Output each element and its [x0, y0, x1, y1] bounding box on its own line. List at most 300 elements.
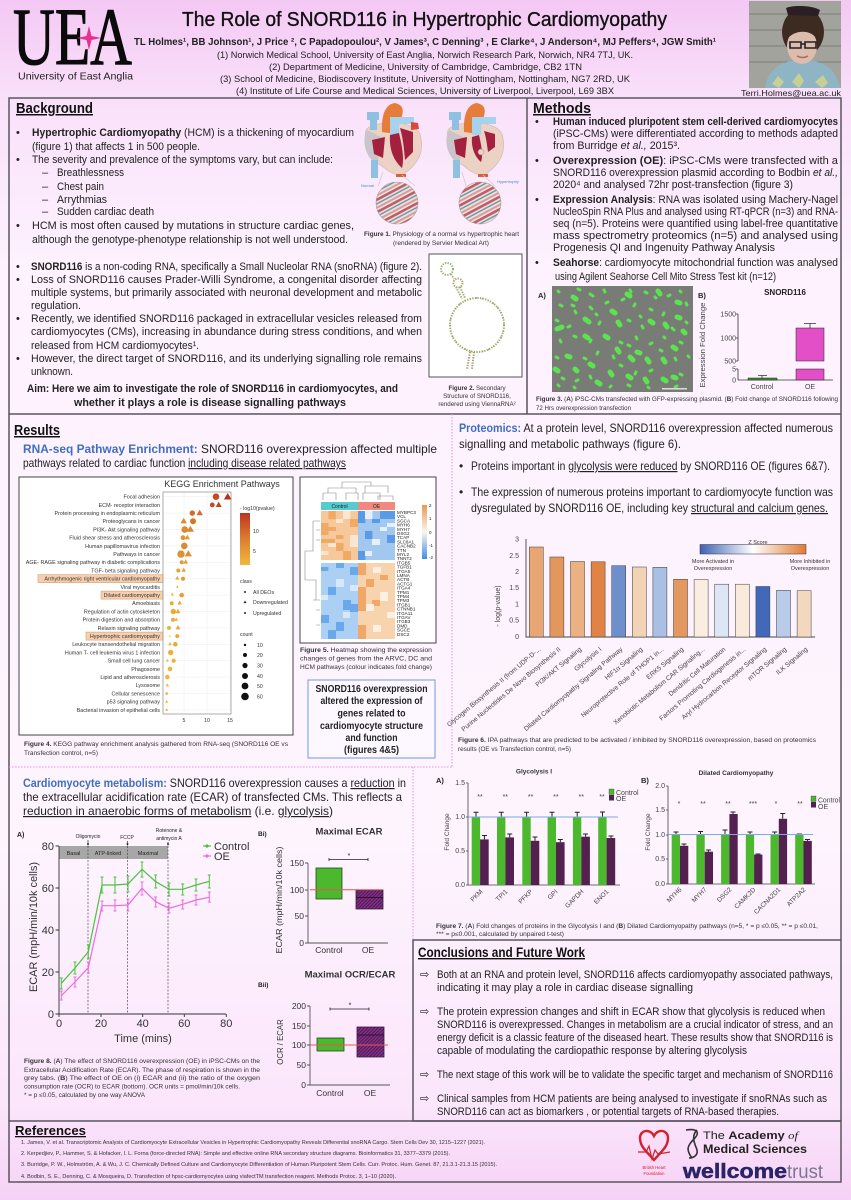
pathway labels: Cellular senescence	[111, 691, 160, 697]
figure 5: heatmap: 0	[429, 530, 432, 535]
gene labels: DSG2	[397, 531, 410, 536]
figure 2 caption: rendered using ViennaRNA²	[438, 401, 516, 408]
figure 7B: dilated cardiomyopathy bars: ***	[749, 801, 757, 808]
figure 7B: dilated cardiomyopathy bars: 2.0	[655, 783, 665, 790]
gene labels: MYBPC3	[397, 510, 416, 515]
figure 8Bi: maximal ECAR box plot: Bi)	[258, 831, 267, 838]
figure 3B: SNORD116 bar chart: OE	[805, 384, 815, 391]
pathway labels: Regulation of actin cytoskeleton	[84, 609, 160, 615]
figure 7A: glycolysis I bars: 0.0	[455, 882, 465, 889]
text block: HCM introduction: Breathlessness	[57, 167, 124, 179]
panel: results	[14, 422, 437, 758]
gene labels: ITGB1	[397, 602, 411, 607]
pathway labels: Lipid and atherosclerosis	[100, 675, 160, 681]
author photo	[749, 1, 841, 88]
figure 7B: dilated cardiomyopathy bars: 0.0	[655, 881, 665, 888]
figure 8Bii: maximal OCR/ECAR box plot: Control	[316, 1088, 344, 1098]
figure 7A: glycolysis I bars: Fold Change	[444, 813, 451, 851]
figure 5 caption: HCM pathways (colour indicates fold change)	[300, 664, 432, 671]
pathway labels: Phagosome	[131, 667, 160, 673]
figure 7A: glycolysis I bars: Glycolysis I	[516, 768, 552, 776]
text block: proteomics summary: Proteins important in glycolysis were reduced by SNORD116 OE (figures 6&7).	[471, 459, 830, 473]
data points	[165, 493, 232, 711]
legends: 50	[257, 684, 263, 690]
figure 8Bii: maximal OCR/ECAR box plot: Maximal OCR/ECAR	[305, 970, 396, 980]
logo: Wellcome Trust: trust	[787, 1162, 824, 1183]
figure 7A: glycolysis I bars: **	[553, 794, 559, 801]
figure 7A: glycolysis I bars: **	[477, 794, 483, 801]
logo: Academy of Medical Sciences: The Academy of	[703, 1130, 800, 1142]
heading: methods: Methods	[533, 100, 591, 117]
text block: HCM introduction: Sudden cardiac death	[57, 206, 154, 218]
pathway labels: Human papillomavirus infection	[85, 544, 160, 550]
figure 2: RNA secondary structure	[429, 254, 522, 377]
figure 7A: glycolysis I bars: 1.5	[455, 780, 465, 787]
legends: Upregulated	[253, 611, 281, 617]
text block: methods list	[535, 116, 839, 283]
figure 7B: dilated cardiomyopathy bars: Fold Change	[645, 813, 652, 851]
icon: normal heart	[364, 103, 422, 178]
heading: references: References	[15, 1123, 86, 1138]
y axis: 0.5	[509, 618, 519, 624]
figure 3B: SNORD116 bar chart	[698, 288, 833, 391]
heatmap blocks	[321, 511, 358, 560]
OE series	[60, 882, 211, 1000]
figure 7B: dilated cardiomyopathy bars: **	[700, 801, 706, 808]
text block: proteomics summary: •	[459, 485, 463, 499]
x axis ticks: 10	[204, 718, 210, 724]
figure 7B: dilated cardiomyopathy bars: **	[797, 801, 803, 808]
figure 8Bi: maximal ECAR box plot	[258, 826, 388, 955]
bar labels: Factors Promoting Cardiogenesis in...	[658, 646, 747, 722]
figure 7A: glycolysis I bars: **	[528, 794, 534, 801]
figure 2 caption: Figure 2. Secondary	[448, 385, 506, 392]
figure 6 caption: Figure 6. IPA pathways that are predicted to be activated / inhibited by SNORD116 overexpression, based on proteomics	[458, 737, 816, 744]
legends: 20	[257, 653, 263, 659]
text block: SNORD116 introduction: regulation.	[31, 300, 81, 312]
text block: HCM introduction: (figure 1) that affects 1 in 500 people.	[32, 141, 200, 153]
bar labels: Aryl Hydrocarbon Receptor Signaling	[681, 646, 769, 721]
figure 3B: SNORD116 bar chart: 5	[732, 366, 736, 374]
axes: 60	[42, 883, 54, 895]
legends: class	[240, 579, 252, 585]
figure 8 caption: grey tabs. ( B) The effect of OE on (i) ECAR and (ii) the ratio of the oxygen	[24, 1075, 261, 1082]
text block: SNORD116 introduction: released from HCM cardiomyocytes¹.	[31, 340, 199, 352]
callout: gene expression summary: altered the expression of	[320, 696, 423, 707]
conclusion 2: ⇨	[420, 1006, 429, 1018]
gene labels: SGCA	[397, 518, 411, 523]
text block: HCM introduction: –	[42, 206, 49, 218]
icon: hypertrophic heart	[446, 103, 504, 178]
chart legend: Control	[214, 841, 249, 853]
bars	[529, 547, 811, 637]
axes: Time (mins)	[114, 1033, 172, 1045]
text block: methods list: Overexpression (OE): iPSC-CMs were transfected with a	[553, 155, 839, 167]
bar labels: Purine Nucleotides De Novo Biosynthesis II	[460, 646, 562, 733]
figure 7A: glycolysis I bars: **	[578, 794, 584, 801]
text block: HCM introduction: •	[16, 220, 20, 232]
pathway labels: Bacterial invasion of epithelial cells	[77, 708, 160, 714]
text block: proteomics summary: dysregulated by SNORD116 OE, including key structural and calcium genes.	[471, 501, 828, 515]
text block: methods list: SNORD116 overexpression plasmid according to Bodbin et al.,	[553, 167, 838, 179]
figure 1: heart illustrations: Normal	[361, 183, 374, 188]
respiration phase tabs: FCCP	[120, 835, 134, 841]
respiration phase tabs: Oligomycin	[76, 834, 101, 840]
text block: metabolism summary: reduction in anaerobic forms of metabolism (i.e. glycolysis)	[23, 804, 333, 818]
text block: SNORD116 introduction: Recently, we identified SNORD116 packaged in extracellular vesicles released from	[31, 313, 422, 325]
pathway labels: Lysosome	[136, 683, 160, 689]
pathway labels: PI3K- Akt signaling pathway	[93, 527, 160, 533]
gene labels: ITGA5	[397, 569, 411, 574]
figure 8Bii: maximal OCR/ECAR box plot: OE	[364, 1088, 376, 1098]
legends: 5	[253, 549, 256, 555]
panel: conclusions and future work	[418, 944, 833, 1118]
respiration phase tabs: ATP-linked	[95, 851, 121, 857]
gene labels: MYL2	[397, 552, 409, 557]
gene labels: ACTG1	[397, 581, 413, 586]
heading: background: Background	[16, 100, 93, 117]
heading: conclusions: Conclusions and Future Work	[418, 944, 585, 960]
y axis: - log(p-value)	[495, 585, 502, 627]
panel: figure 7 protein fold changes	[436, 768, 840, 938]
figure 8 caption: Extracellular Acidification Rate (ECAR). The phase of respiration is shown in the	[24, 1067, 261, 1074]
figure 7B: dilated cardiomyopathy bars: Control	[818, 798, 840, 804]
reference list: 2. Kerpedjiev, P., Hammer, S. & Hofacker, I. L. Forna (force-directed RNA): Simple and effective online RNA secondary structure diagrams. Bioinformatics 31, 3377–3379 (2015).	[21, 1151, 450, 1157]
text block: HCM introduction: •	[16, 154, 20, 166]
text block: methods list: •	[535, 155, 539, 167]
callout: gene expression summary: SNORD116 overexpression	[316, 684, 428, 695]
figure 7B: dilated cardiomyopathy bars	[641, 770, 840, 916]
gene labels: ITGB3	[397, 619, 411, 624]
gene labels: TNNT2	[397, 556, 412, 561]
figure 7B: dilated cardiomyopathy bars: CAMK2D	[733, 886, 758, 911]
text block: HCM introduction: Hypertrophic Cardiomyopathy (HCM) is a thickening of myocardium	[32, 127, 354, 139]
figure 8Bi: maximal ECAR box plot: Control	[315, 945, 343, 955]
pathway labels: Focal adhesion	[123, 495, 160, 501]
pathway labels: Arrhythmogenic right ventricular cardiomyopathy	[44, 577, 160, 583]
logo: Wellcome Trust	[682, 1161, 824, 1183]
legends: 60	[257, 694, 263, 700]
text block: SNORD116 introduction: cardiomyocytes (CMs), increasing in abundance during stress conditions, and when	[31, 326, 422, 338]
pathway labels: Dilated cardiomyopathy	[104, 593, 160, 599]
axes: ECAR (mpH/min/10k cells)	[28, 862, 40, 992]
figure 7A: glycolysis I bars: 1.0	[455, 814, 465, 821]
gene labels	[397, 510, 416, 637]
figure 4: KEGG dot plot: KEGG Enrichment Pathways	[164, 479, 280, 489]
gene labels: DSC2	[397, 632, 410, 637]
y axis: 2	[515, 569, 519, 576]
conclusion 1: indicating it may play a role in cardiac disease signalling	[437, 982, 693, 994]
control series	[60, 862, 211, 989]
y axis	[495, 536, 815, 641]
pathway labels: Human T- cell leukemia virus 1 infection	[65, 650, 160, 656]
figure 1: heart illustrations	[361, 103, 519, 224]
figure 5: heatmap	[300, 477, 436, 643]
panel: cardiomyocyte metabolism	[17, 776, 406, 1099]
callout: gene expression summary: and function	[346, 733, 398, 744]
figure 8Bii: maximal OCR/ECAR box plot: Bii)	[258, 982, 268, 989]
figure 7 caption	[436, 923, 818, 938]
pathway labels	[26, 495, 161, 714]
pathway labels: Protein digestion and absorption	[83, 618, 160, 624]
figure 2 caption: Structure of SNORD116,	[443, 393, 511, 400]
respiration phase tabs	[59, 828, 183, 1014]
legends: 30	[257, 664, 263, 670]
figure 7A: glycolysis I bars: 0.5	[455, 848, 465, 855]
text block: methods list: (iPSC-CMs) were differentiated according to methods adapted	[553, 128, 838, 140]
gene labels: ACTB	[397, 577, 409, 582]
text block: SNORD116 introduction: unknown.	[31, 366, 73, 378]
chart legend	[203, 841, 249, 863]
figure 7B: dilated cardiomyopathy bars: 1.5	[655, 807, 665, 814]
aim statement: Aim: Here we aim to investigate the role of SNORD116 in cardiomyocytes, and	[27, 383, 398, 395]
text block: HCM introduction: –	[42, 167, 49, 179]
figure 3B: SNORD116 bar chart: SNORD116	[764, 288, 806, 297]
figure 5: heatmap: 2	[429, 503, 432, 508]
gene labels: TPM4	[397, 594, 410, 599]
authors: TL Holmes¹, BB Johnson¹, J Price ², C Papadopoulou², V James³, C Denning³ , E Clarke⁴, J Anderson⁴, MJ Peffers⁴, JGW Smith¹	[134, 37, 717, 48]
figure 7A: glycolysis I bars: PFKP	[517, 888, 534, 905]
gene labels: ITGAV	[397, 615, 411, 620]
figure 1: heart illustrations: Hypertrophy	[497, 179, 519, 184]
logo: Academy of Medical Sciences	[686, 1130, 807, 1158]
z score legend: Z Score	[748, 540, 768, 546]
gene labels: ITGA11	[397, 611, 413, 616]
gene labels: TCAP	[397, 535, 409, 540]
figure 8Bi: maximal ECAR box plot: 150	[290, 858, 304, 868]
text block: HCM introduction: Arrythmias	[57, 194, 107, 206]
legends: All DEOs	[253, 590, 274, 596]
figure 7B: dilated cardiomyopathy bars: 0.5	[655, 856, 665, 863]
figure 7B: dilated cardiomyopathy bars: Dilated Cardiomyopathy	[699, 770, 774, 777]
text block: metabolism summary	[23, 776, 406, 818]
text block: methods list: using Agilent Seahorse Cell Mito Stress Test kit (n=12)	[555, 271, 776, 283]
text block: methods list: •	[535, 194, 539, 206]
figure 8 caption: Figure 8. (A) The effect of SNORD116 overexpression (OE) in iPSC-CMs on the	[24, 1058, 261, 1065]
gene labels: SGCE	[397, 628, 410, 633]
z score legend	[692, 540, 830, 572]
figure 4: KEGG dot plot	[19, 477, 293, 735]
z score legend: More Inhibited in	[790, 559, 830, 565]
figure 8Bii: maximal OCR/ECAR box plot: *	[349, 1002, 352, 1010]
figure 8 caption: consumption rate (OCR) to ECAR (bottom). OCR units = pmol/min/10k cells.	[24, 1084, 240, 1090]
pathway labels: Amoebiasis	[132, 601, 160, 607]
figure 6: IPA pathway bar chart	[446, 536, 830, 733]
figure 5: heatmap: OE	[373, 504, 381, 510]
figure 7B: dilated cardiomyopathy bars: CACNA2D1	[753, 886, 783, 916]
text block: RNA-seq pathway enrichment: RNA-seq Pathway Enrichment: SNORD116 overexpression affected multiple	[23, 442, 437, 456]
bar labels: Neuroprotective Role of THOP1 in...	[580, 646, 665, 719]
conclusion 1: ⇨	[420, 969, 429, 981]
gene labels: DMD	[397, 623, 408, 628]
conclusion 1	[420, 969, 833, 994]
text block: HCM introduction: •	[16, 127, 20, 139]
z score legend: Overexpression	[791, 566, 829, 572]
figure 8Bii: maximal OCR/ECAR box plot: 100	[292, 1040, 306, 1050]
figure 1 caption: (rendered by Servier Medical Art)	[393, 240, 489, 247]
figure 8Bii: maximal OCR/ECAR box plot: 150	[292, 1021, 306, 1031]
gene labels: TGFB1	[397, 565, 412, 570]
affiliations: (3) School of Medicine, Biodiscovery Institute, University of Nottingham, Nottingham, NG7 2RD, UK	[220, 74, 631, 85]
figure 3B: SNORD116 bar chart: Expression Fold Change	[700, 302, 707, 388]
pathway labels: p53 signaling pathway	[107, 700, 160, 706]
figure 3 caption: 72 Hrs overexpression transfection	[536, 405, 632, 412]
figure 4 caption: Transfection control, n=5)	[24, 750, 98, 757]
bar labels: PI3K/AKT Signaling	[535, 646, 584, 689]
figure 8 caption	[24, 1058, 261, 1099]
figure 3B: SNORD116 bar chart: 1500	[720, 312, 736, 318]
pathway labels: Leukocyte transendothelial migration	[72, 642, 160, 648]
figure 8Bi: maximal ECAR box plot: *	[348, 853, 351, 860]
gene labels: ITGB5	[397, 560, 411, 565]
axes: 0	[56, 1018, 62, 1030]
figure 3B: SNORD116 bar chart: 1000	[720, 336, 736, 342]
text block: HCM introduction: HCM is most often caused by mutations in structure cardiac genes,	[32, 220, 354, 232]
conclusion 4: ⇨	[420, 1093, 429, 1105]
affiliations: (1) Norwich Medical School, University of East Anglia, Norwich Research Park, Norwich, NR4 7TJ, UK.	[217, 50, 633, 61]
email: Terri.Holmes@uea.ac.uk	[741, 88, 842, 98]
figure 7A: glycolysis I bars: **	[599, 794, 605, 801]
bar labels: Dilated Cardiomyopathy Signaling Pathway	[523, 646, 625, 733]
conclusion 4: SNORD116 can act as biomarkers , or potential targets of RNA-based therapies.	[437, 1106, 779, 1118]
text block: methods list: Expression Analysis: RNA was isolated using Machery-Nagel	[553, 194, 838, 206]
pathway labels: Protein processing in endoplasmic reticulum	[55, 511, 161, 517]
figure 3A: GFP microscopy image: A)	[538, 291, 546, 300]
bar labels: Xenobiotic Metabolism CAR Signaling...	[613, 646, 706, 726]
figure 7A: glycolysis I bars: **	[503, 794, 508, 801]
figure 7B: dilated cardiomyopathy bars: MYH7	[691, 886, 709, 904]
text block: SNORD116 introduction: multiple systems, but primarily associated with neuronal development and metabolic	[31, 287, 422, 299]
heading: results: Results	[14, 422, 60, 439]
axes: 40	[42, 925, 54, 937]
figure 7A: glycolysis I bars: OE	[616, 796, 626, 803]
gene labels: TTN	[397, 548, 406, 553]
panel: methods	[533, 100, 839, 412]
text block: SNORD116 introduction: •	[16, 274, 20, 286]
figure 3 caption	[536, 396, 839, 412]
text block: methods list: mass spectrometry proteomics (n=5) and analysed using	[553, 230, 838, 242]
axes: 80	[220, 1018, 232, 1030]
bar labels: mTOR Signaling	[747, 646, 789, 683]
text block: HCM introduction: The severity and prevalence of the symptoms vary, but can include:	[32, 154, 333, 166]
figure 8Bii: maximal OCR/ECAR box plot	[258, 970, 396, 1098]
text block: RNA-seq pathway enrichment: pathways related to cardiac function including disease related pathways	[23, 456, 346, 470]
figure 8Bii: maximal OCR/ECAR box plot: 50	[297, 1060, 306, 1070]
figure 8Bii: maximal OCR/ECAR box plot: OCR / ECAR	[276, 1019, 285, 1065]
reference list	[21, 1140, 497, 1180]
gene labels: LMNA	[397, 573, 411, 578]
logo: University of East Anglia: University of East Anglia	[18, 70, 133, 82]
figure 8Bi: maximal ECAR box plot: Maximal ECAR	[315, 826, 383, 838]
legends: 10	[253, 529, 259, 535]
pathway labels: Hypertrophic cardiomyopathy	[90, 634, 160, 640]
text block: metabolism summary: Cardiomyocyte metabolism: SNORD116 overexpression causes a reduction in	[23, 776, 406, 790]
figure 7 caption: *** = p≤0.001, calculated by unpaired t-test)	[436, 931, 564, 938]
pathway labels: Proteoglycans in cancer	[102, 519, 160, 525]
pathway labels: Relaxin signaling pathway	[98, 626, 160, 632]
text block: HCM introduction: –	[42, 181, 49, 193]
figure 8Bi: maximal ECAR box plot: 100	[290, 885, 304, 895]
conclusion 2	[420, 1006, 833, 1057]
figure 6 caption: results (OE vs Transfection control, n=5)	[458, 746, 571, 753]
legends: 40	[257, 674, 263, 680]
legends: - log10(pvalue)	[240, 506, 275, 512]
legends: 10	[257, 643, 263, 649]
figure 7A: glycolysis I bars: GPI	[547, 888, 560, 901]
icon: normal muscle tissue	[376, 182, 418, 224]
panel: proteomics	[446, 421, 833, 753]
gene labels: TPM1	[397, 590, 410, 595]
text block: methods list: Progenesis QI and Ingenuity Pathway Analysis	[553, 242, 775, 254]
axes: 20	[95, 1018, 107, 1030]
axes: 80	[42, 841, 54, 853]
y axis: 1.5	[509, 585, 519, 592]
gene labels: CACNB2	[397, 544, 416, 549]
gene labels: ITGA4	[397, 586, 411, 591]
text block: metabolism summary: the extracellular acidification rate (ECAR) of transfected CMs. This reflects a	[23, 790, 402, 804]
text block: SNORD116 introduction: •	[16, 313, 20, 325]
pathway labels: TGF- beta signaling pathway	[91, 568, 160, 574]
figure 3A: GFP microscopy image	[538, 286, 693, 392]
z score legend: Overexpression	[694, 566, 732, 572]
figure 8Bi: maximal ECAR box plot: ECAR (mpH/min/10k cells)	[275, 846, 284, 953]
pathway labels: Fluid shear stress and atherosclerosis	[69, 536, 160, 542]
respiration phase tabs: Maximal	[138, 851, 158, 857]
figure 7B: dilated cardiomyopathy bars: MYH6	[666, 886, 684, 904]
reference list: 3. Burridge, P. W., Holmström, A. & Wu, J. C. Chemically Defined Culture and Cardiomyocyte Differentiation of Human Pluripotent Stem Cells. Curr. Protoc. Hum. Genet. 87, 21.3.1-21.3.15 (2015).	[21, 1162, 497, 1168]
figure 5: heatmap: 1	[429, 516, 432, 521]
reference list: 1. James, V. et al. Transcriptomic Analysis of Cardiomyocyte Extracellular Vesicles in Hypertrophic Cardiomyopathy Reveals Differential snoRNA Cargo. Stem Cells Dev 30, 1215–1227 (2021).	[21, 1140, 485, 1146]
conclusion 3: ⇨	[420, 1069, 429, 1081]
text block: SNORD116 introduction: Loss of SNORD116 causes Prader-Willi Syndrome, a congenital disorder affecting	[31, 274, 422, 286]
highlighted pathways	[38, 575, 163, 640]
text block: methods list: •	[535, 257, 539, 269]
figure 7B: dilated cardiomyopathy bars: OE	[818, 804, 828, 811]
bar labels: ILK Signaling	[775, 646, 810, 677]
legends: count	[240, 632, 253, 638]
panel: references	[15, 1123, 824, 1183]
text block: RNA-seq pathway enrichment	[23, 442, 437, 470]
text block: SNORD116 introduction: However, the direct target of SNORD116, and its underlying signalling role remains	[31, 353, 422, 365]
axes: 60	[178, 1018, 190, 1030]
figure 8Bi: maximal ECAR box plot: 0	[299, 938, 304, 948]
text block: SNORD116 introduction: •	[16, 353, 20, 365]
pathway labels: Viral myocarditis	[121, 585, 160, 591]
text block: HCM introduction: Chest pain	[57, 181, 104, 193]
text block: HCM introduction	[16, 127, 354, 246]
legends	[240, 506, 288, 700]
y axis: 0	[515, 634, 519, 641]
figure 8A: ECAR time course	[17, 828, 249, 1045]
axes: 40	[137, 1018, 149, 1030]
figure 8Bii: maximal OCR/ECAR box plot: 0	[301, 1080, 306, 1090]
bar labels	[446, 646, 810, 733]
figure 5 caption: Figure 5. Heatmap showing the expression	[300, 647, 433, 654]
figure 3B: SNORD116 bar chart: 500	[724, 358, 736, 366]
y axis: 1	[515, 602, 519, 608]
text block: methods list: Seahorse: cardiomyocyte mitochondrial function was analysed	[553, 257, 838, 269]
affiliations: (4) Institute of Life Course and Medical Sciences, University of Liverpool, Liverpool, L69 3BX	[236, 86, 615, 97]
figure 6 caption	[458, 737, 816, 753]
text block: proteomics summary	[459, 421, 833, 515]
figure 8Bi: maximal ECAR box plot: OE	[362, 945, 374, 955]
text block: SNORD116 introduction: SNORD116 is a non-coding RNA, specifically a Small Nucleolar RNA (snoRNA) (figure 2).	[31, 261, 422, 273]
text block: HCM introduction: although the genotype-phenotype relationship is not well understood.	[32, 234, 348, 246]
bar labels: Glycogen Biosynthesis II (from UDP-D-...	[446, 646, 542, 729]
figure 1 caption: Figure 1. Physiology of a normal vs hypertrophic heart	[364, 231, 519, 238]
respiration phase tabs: Rotenone &	[156, 828, 183, 834]
text block: SNORD116 introduction: •	[16, 261, 20, 273]
